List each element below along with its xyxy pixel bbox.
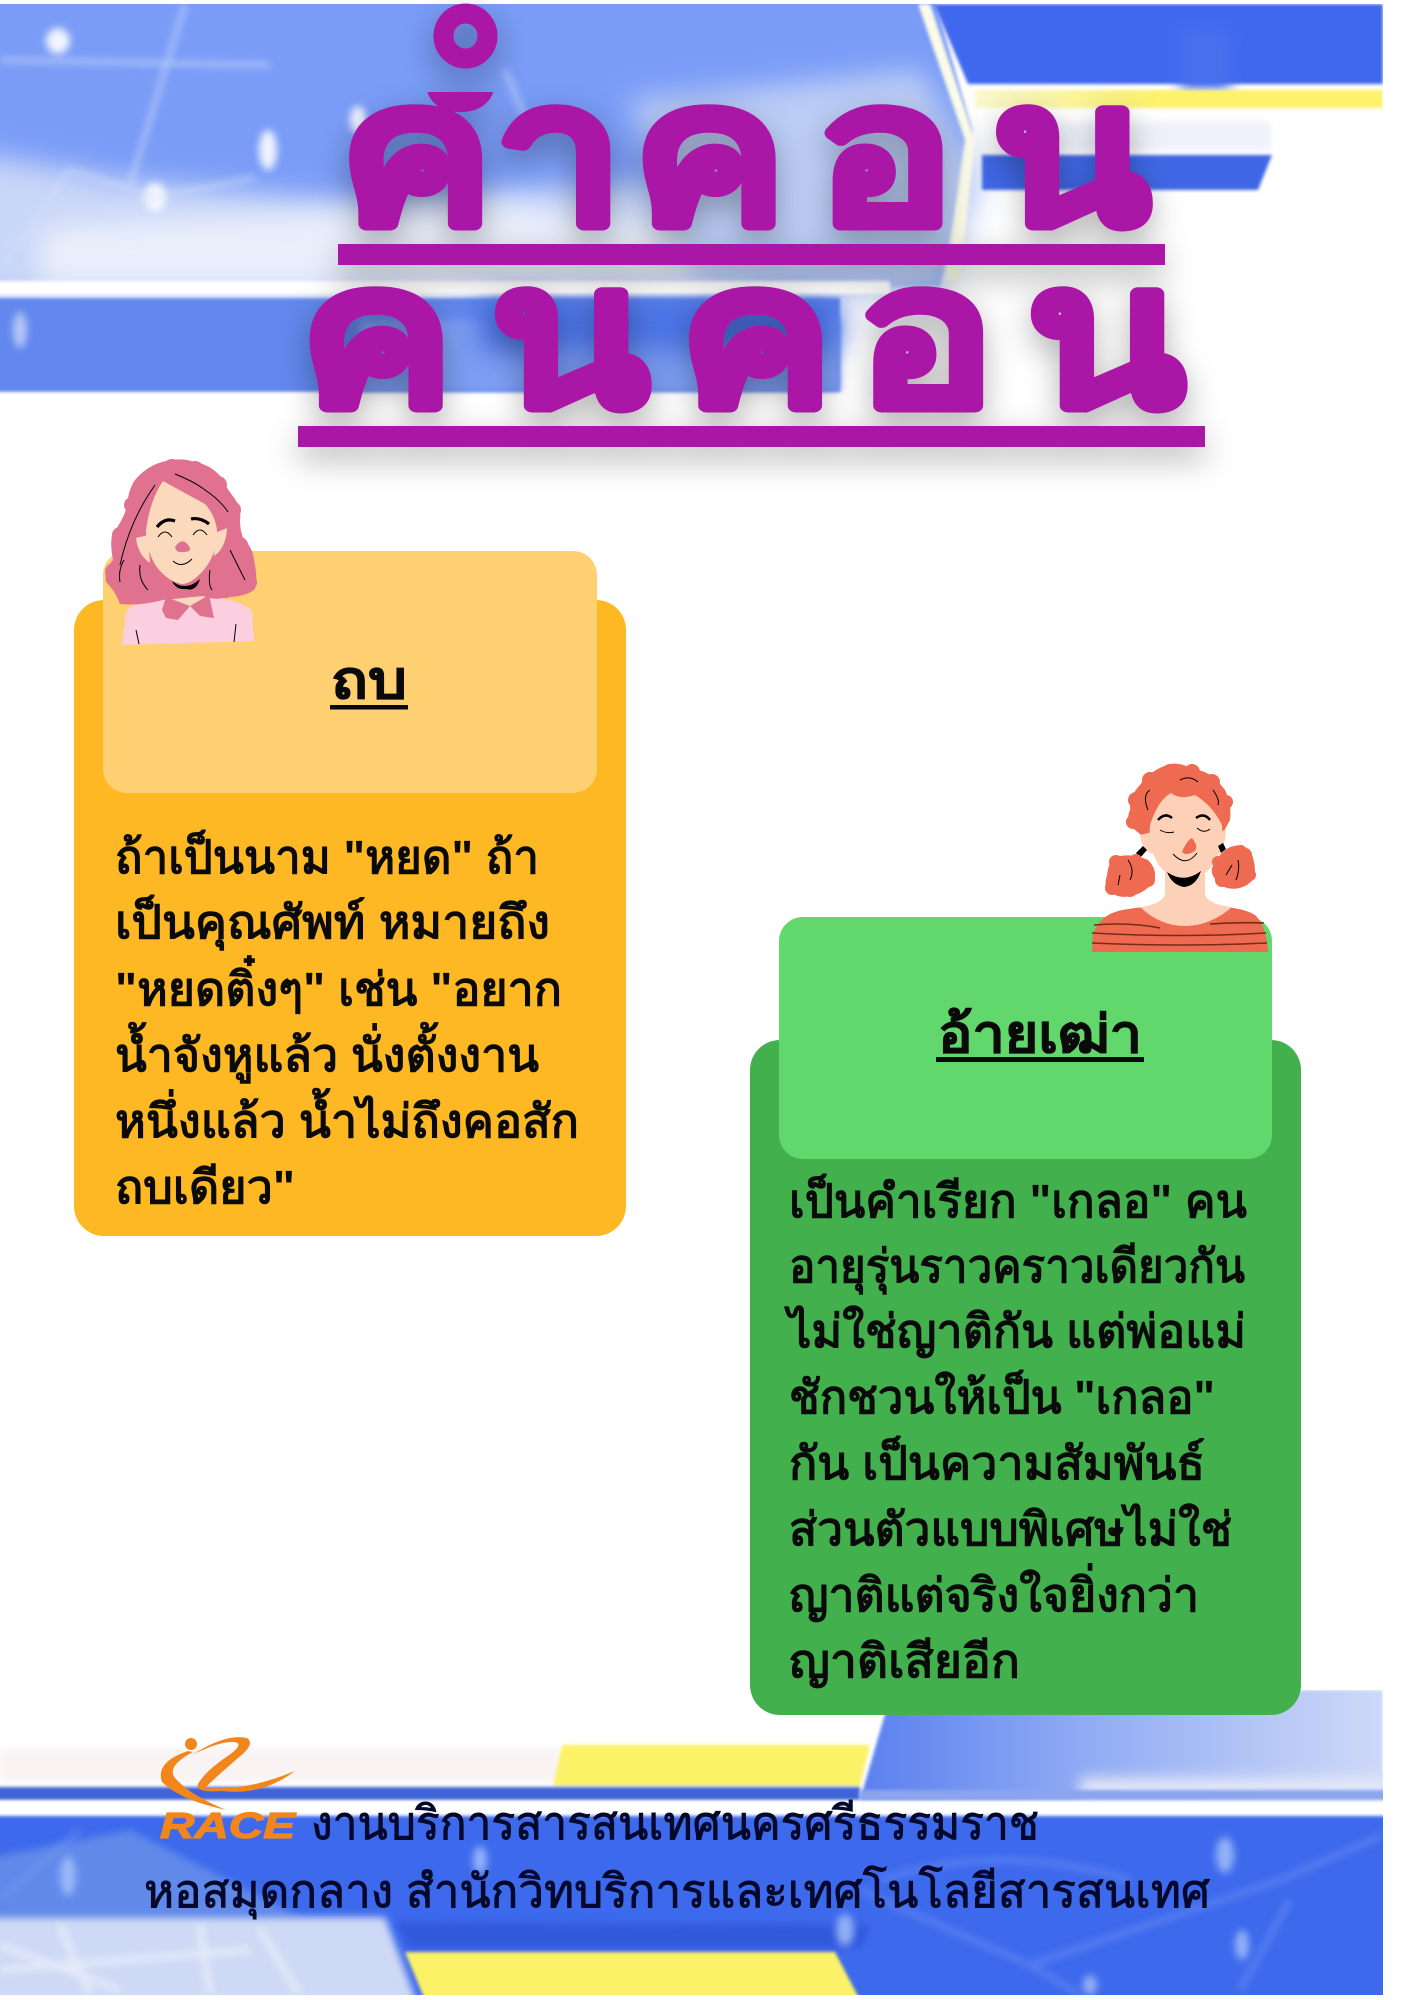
text block: definition of อ้ายเฒ่า: ญาติเสียอีก [789,1635,1020,1688]
heading: อ้ายเฒ่า: อ้ายเฒ่า [938,1006,1142,1064]
title line 2 [298,225,1205,448]
title line 2: ค [679,225,834,448]
panel header card [103,551,597,793]
icon: pink-haired girl [105,459,257,645]
logo swoosh [161,1737,295,1810]
title line 2: ค [299,225,454,448]
text block: definition of ถบ [115,829,579,1213]
heading: ถบ: ถบ [331,652,407,710]
text block: definition of อ้ายเฒ่า [783,1173,1248,1688]
text block: definition of อ้ายเฒ่า: กัน เป็นความสัมพันธ์ [789,1435,1205,1489]
text block: definition of อ้ายเฒ่า: ไม่ใช่ญาติกัน แต่พ่อแม่ [783,1304,1246,1358]
title line 2: น [491,225,649,448]
title line 1 [338,14,1165,266]
logo: RACE [160,1737,296,1846]
text block: definition of อ้ายเฒ่า: เป็นคำเรียก "เกลอ" คน [789,1173,1248,1227]
title [298,14,1205,448]
text block: definition of อ้ายเฒ่า: อายุรุ่นราวคราวเดียวกัน [789,1240,1246,1295]
text block: definition of ถบ: เป็นคุณศัพท์ หมายถึง [115,894,550,951]
text block: definition of ถบ: ถบเดียว" [115,1161,295,1213]
text block: definition of ถบ: ถ้าเป็นนาม "หยด" ถ้า [115,829,539,883]
title line 1: อ [815,43,955,266]
footer [144,1737,1210,1920]
footer line 1: งานบริการสารสนเทศนครศรีธรรมราช [311,1797,1039,1849]
title line 1: ค [632,43,787,266]
text block: definition of อ้ายเฒ่า: ญาติแต่จริงใจยิ่งกว่า [789,1563,1199,1622]
panel back [750,1040,1301,1715]
title line 2: น [1027,225,1185,448]
text block: definition of ถบ: น้ำจังหูแล้ว นั่งตั้งงาน [115,1021,540,1084]
title line 1: น [992,43,1150,266]
text block: definition of ถบ: หนึ่งแล้ว น้ำไม่ถึงคอสัก [115,1087,579,1147]
icon: red-haired girl [1092,764,1268,952]
panel: อ้ายเฒ่า [750,764,1301,1715]
text block: definition of ถบ: "หยดติ๋งๆ" เช่น "อยาก [115,955,562,1015]
background: bottom banner [0,1690,1410,2000]
panel header card [779,917,1272,1159]
logo wordmark: RACE [160,1805,296,1846]
text block: definition of อ้ายเฒ่า: ชักชวนให้เป็น "เกลอ" [789,1369,1215,1423]
title line 1: คำ [339,43,624,266]
background: top banner [0,0,1383,424]
panel back [74,600,626,1236]
footer line 2: หอสมุดกลาง สำนักวิทบริการและเทศโนโลยีสารสนเทศ [144,1865,1210,1920]
panel: ถบ [74,459,626,1236]
title line 2: อ [856,225,995,448]
text block: definition of อ้ายเฒ่า: ส่วนตัวแบบพิเศษไม่ใช่ [789,1502,1232,1555]
